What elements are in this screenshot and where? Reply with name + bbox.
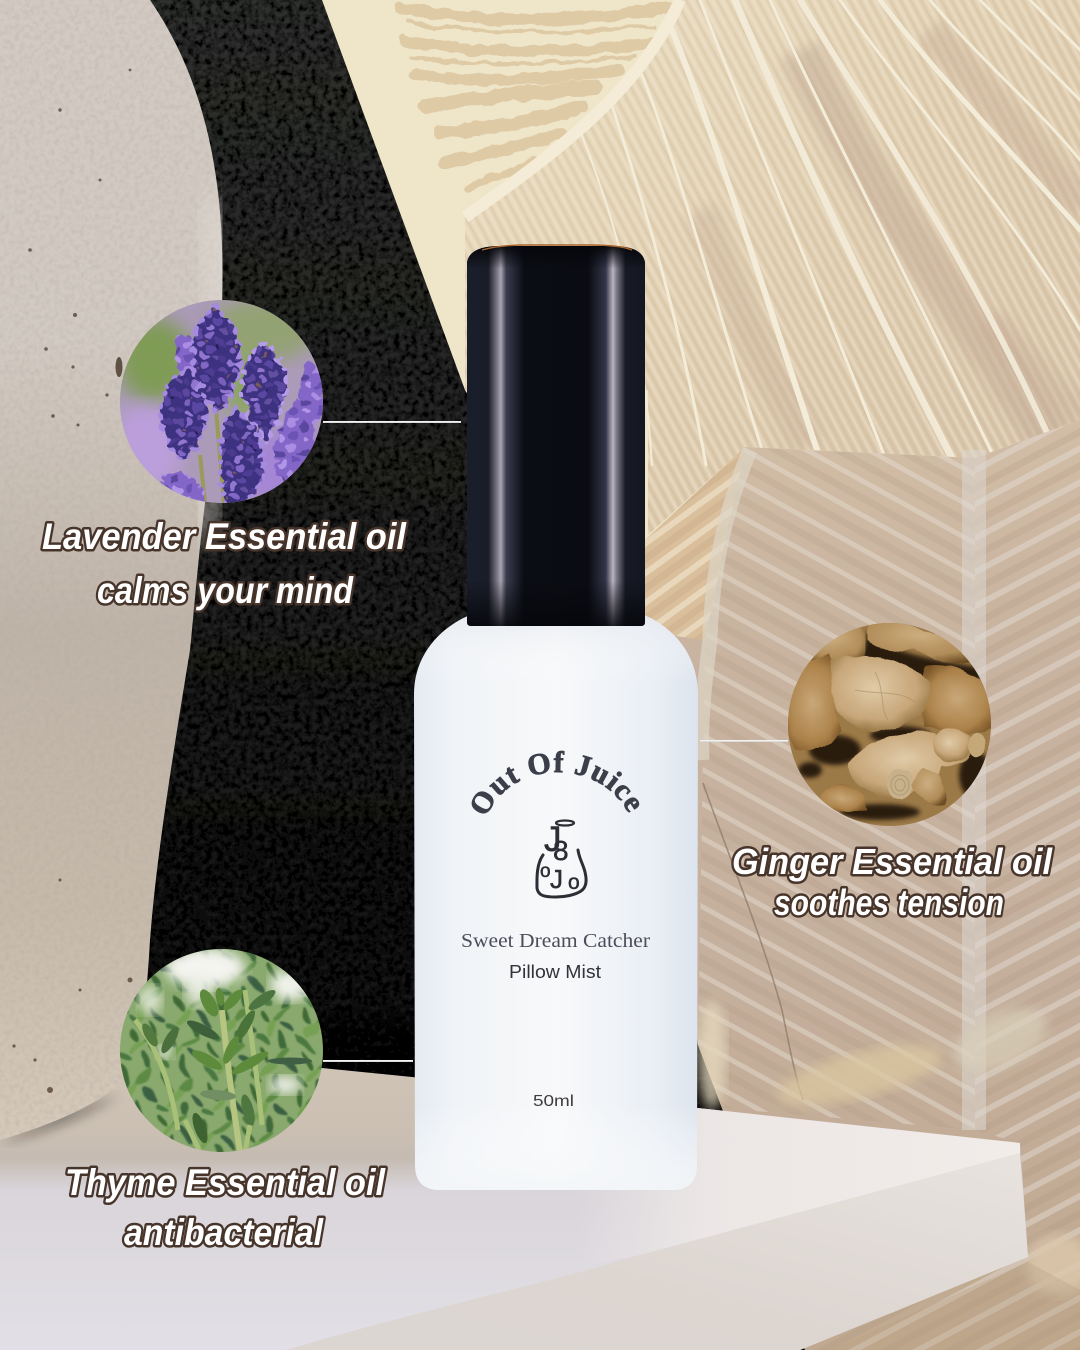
- product type: Pillow Mist: [509, 962, 601, 982]
- caption: thyme: [65, 1162, 388, 1253]
- cream fan stripes: [580, 0, 1080, 470]
- product name: Sweet Dream Catcher: [461, 930, 650, 952]
- black spray cap: [467, 245, 645, 626]
- tan bands of the cream leaf: [400, 6, 670, 205]
- photo: lavender: [120, 300, 323, 503]
- white shelf: [0, 1060, 1028, 1350]
- connector line: [323, 421, 461, 423]
- stone vase: [0, 0, 222, 1143]
- caption: lavender: calms your mind: [97, 570, 354, 611]
- logo: bottle mark: J: [550, 864, 563, 894]
- caption: ginger: Ginger Essential oil: [732, 841, 1053, 882]
- patterned pillow: [322, 0, 1080, 1350]
- photo: ginger: [788, 623, 991, 826]
- caption: ginger: [731, 841, 1055, 923]
- black fabric backdrop: [100, 0, 800, 1350]
- logo: bottle mark: o: [540, 861, 551, 882]
- product bottle: [414, 244, 698, 1190]
- bottle body: [414, 615, 698, 1190]
- mauve patches: [700, 30, 1080, 445]
- logo: bottle mark: 8: [553, 835, 569, 866]
- brand name arched: Out Of Juice: [472, 750, 640, 814]
- logo: bottle mark: J: [544, 820, 562, 859]
- caption: lavender: [40, 516, 409, 613]
- callout: ginger: [700, 623, 1055, 923]
- connector line: [700, 740, 788, 742]
- photo: thyme: [120, 949, 323, 1152]
- logo: bottle mark: o: [568, 871, 580, 894]
- callout: thyme: [65, 949, 413, 1253]
- callout: lavender: [40, 300, 461, 613]
- connector line: [323, 1060, 413, 1062]
- caption: thyme: antibacterial: [124, 1212, 324, 1253]
- caption: ginger: soothes tension: [774, 882, 1004, 923]
- lower leaf: [645, 420, 1080, 1350]
- logo: bottle mark: [537, 820, 586, 897]
- pale vertical seam: [962, 450, 986, 1130]
- volume: 50ml: [533, 1093, 574, 1110]
